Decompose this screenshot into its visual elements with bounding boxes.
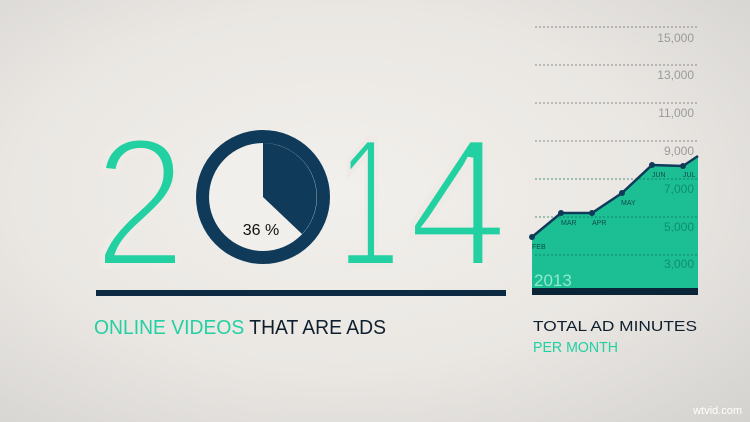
caption left: ONLINE VIDEOS THAT ARE ADS	[94, 317, 386, 339]
area chart: 13,000	[657, 68, 694, 82]
digit 2: 2	[94, 99, 186, 305]
area chart: 11,000	[658, 106, 694, 120]
caption right: TOTAL AD MINUTES	[533, 318, 697, 335]
digit 1: 1	[338, 99, 400, 305]
data line	[532, 156, 698, 237]
area chart: 3,000	[664, 257, 694, 271]
area chart: 9,000	[664, 144, 694, 158]
caption right: PER MONTH	[533, 339, 618, 356]
underline	[96, 290, 506, 296]
area chart: 5,000	[664, 220, 694, 234]
digit 4: 4	[408, 99, 508, 305]
area chart: APR	[592, 220, 606, 227]
label 2013: 2013	[534, 271, 572, 290]
caption right	[533, 318, 697, 356]
area chart: JUL	[683, 172, 696, 179]
area fill	[532, 156, 698, 290]
area chart: 15,000	[657, 31, 694, 45]
area chart: MAR	[561, 220, 577, 227]
area chart	[529, 27, 698, 295]
label 36%: 36 %	[243, 222, 279, 239]
pie chart 36%	[196, 130, 330, 264]
area chart: JUN	[652, 172, 666, 179]
area chart: MAY	[621, 200, 636, 207]
area chart: 7,000	[664, 182, 694, 196]
watermark: wtvid.com	[692, 405, 742, 417]
area chart: FEB	[532, 244, 546, 251]
